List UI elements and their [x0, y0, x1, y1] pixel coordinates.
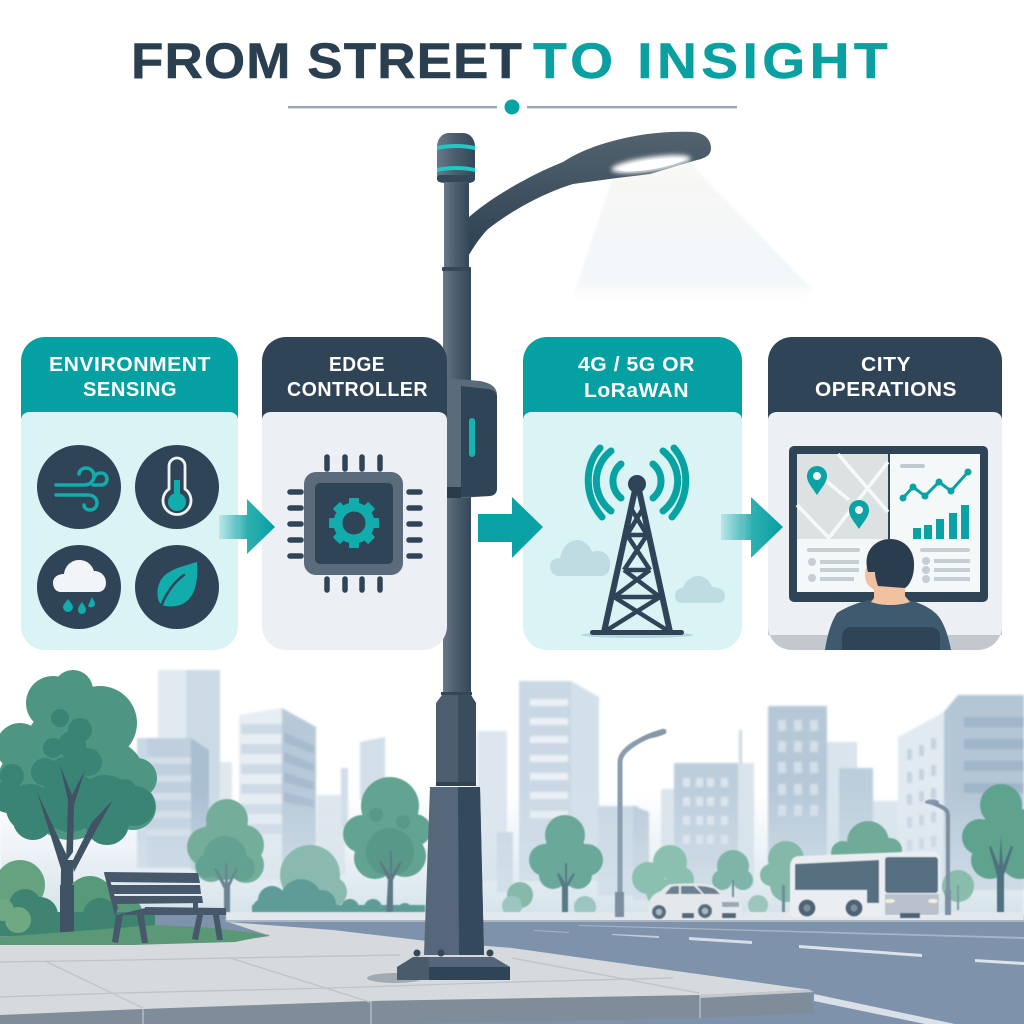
title: TO INSIGHT [533, 33, 892, 89]
map pins [807, 466, 827, 495]
pavement [0, 922, 814, 1024]
upper pole shaft [444, 180, 469, 270]
tree: small left [187, 799, 264, 920]
signal arcs [588, 448, 686, 517]
street lamp: background left [615, 729, 666, 917]
arrow 2 [478, 497, 543, 558]
lamp pole [397, 132, 711, 980]
icon: wind [37, 445, 121, 529]
ground haze [0, 790, 1024, 920]
bench [104, 872, 226, 943]
road [0, 912, 1024, 1024]
light cone [570, 163, 813, 305]
monitor [789, 446, 988, 602]
panel: edge controller [262, 337, 447, 650]
person [825, 539, 951, 650]
pole base [397, 957, 510, 980]
city skyline [137, 670, 1024, 900]
big tree [0, 670, 157, 935]
bus [790, 851, 940, 918]
panel: connectivity [523, 337, 742, 650]
heading: CITY [861, 353, 911, 376]
clouds [550, 540, 725, 603]
arrow 1 [219, 499, 275, 554]
panel: connectivity: LoRaWAN [584, 379, 689, 402]
icon: leaf [135, 545, 219, 629]
lamp arm and head [467, 132, 711, 258]
title: FROM STREET [131, 33, 523, 89]
heading: 4G / 5G OR [578, 353, 695, 376]
lower pole flare [424, 787, 484, 955]
tower [581, 448, 693, 638]
street lamp: background right [925, 800, 951, 915]
panel: city operations [768, 337, 1002, 650]
list rows [807, 548, 970, 583]
bushes: left [0, 860, 155, 937]
arrow 3 [721, 497, 783, 558]
lower pole collar [436, 695, 476, 783]
bush: middle cluster [252, 845, 425, 921]
sensor cap [437, 133, 475, 183]
lamp light [610, 152, 692, 176]
tree: right of pole [502, 815, 603, 918]
trees: mid street [632, 821, 974, 915]
tree: behind pole [343, 777, 431, 917]
map roads [797, 454, 888, 539]
distant trees and bushes [187, 777, 1024, 921]
icon: chip with gear [290, 457, 420, 590]
tree: far right [962, 784, 1024, 917]
title [131, 33, 892, 89]
grass [0, 925, 270, 945]
heading: ENVIRONMENT [49, 353, 211, 376]
panel: city operations: OPERATIONS [815, 378, 957, 401]
bar chart [913, 505, 969, 539]
panel: environment sensing [21, 337, 238, 650]
heading: EDGE [329, 353, 385, 376]
car [648, 883, 741, 919]
panel: environment sensing: SENSING [83, 378, 177, 401]
line chart [900, 464, 925, 468]
edge controller box on pole [447, 378, 497, 498]
icon: rain cloud [37, 545, 121, 629]
panel: edge controller: CONTROLLER [287, 378, 428, 401]
title divider [288, 100, 737, 114]
icon: thermometer [135, 445, 219, 529]
